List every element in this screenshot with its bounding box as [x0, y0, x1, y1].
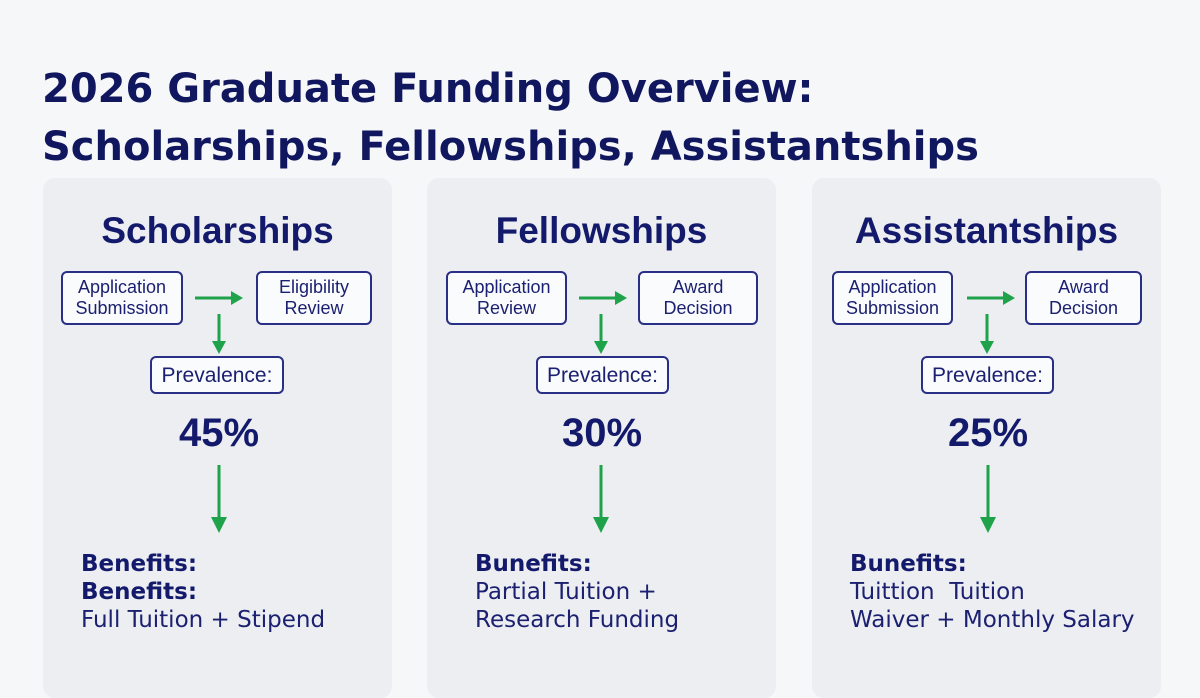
box: application review: [446, 271, 567, 325]
box: prevalence: Prevalence:: [547, 364, 658, 386]
stat: 25%: 25%: [948, 411, 1028, 455]
panel: fellowships: [427, 178, 776, 698]
box: application review: Application: [462, 277, 551, 297]
box: eligibility review: Review: [284, 298, 344, 318]
heading: Fellowships: [496, 210, 707, 251]
box: prevalence: [536, 356, 669, 394]
benefits text: Benefits:: [81, 551, 197, 577]
stat: 30%: 30%: [562, 411, 642, 455]
arrows: [579, 291, 627, 533]
box: award decision: Decision: [1049, 298, 1118, 318]
box: prevalence: [921, 356, 1054, 394]
box: application submission: Submission: [75, 298, 169, 318]
box: prevalence: Prevalence:: [932, 364, 1043, 386]
box: award decision: [638, 271, 758, 325]
box: award decision: Award: [673, 277, 723, 297]
benefits text: [475, 551, 679, 633]
benefits text: [850, 551, 1135, 633]
box: prevalence: Prevalence:: [162, 364, 272, 386]
benefits text: [81, 551, 325, 633]
benefits text: Waiver + Monthly Salary: [850, 607, 1135, 633]
box: application submission: [61, 271, 183, 325]
box: eligibility review: Eligibility: [279, 277, 349, 297]
box: application submission: [832, 271, 953, 325]
benefits text: Bunefits:: [475, 551, 592, 577]
box: application submission: Application: [78, 277, 166, 297]
arrows: [967, 291, 1015, 533]
box: award decision: [1025, 271, 1142, 325]
box: eligibility review: [256, 271, 372, 325]
heading: Assistantships: [855, 210, 1118, 251]
title: Scholarships, Fellowships, Assistantships: [42, 124, 979, 170]
benefits text: Partial Tuition +: [475, 579, 657, 605]
box: application submission: Submission: [846, 298, 939, 318]
benefits text: Benefits:: [81, 579, 197, 605]
benefits text: Tuittion Tuition: [850, 579, 1025, 605]
benefits text: Bunefits:: [850, 551, 967, 577]
panel: scholarships: [43, 178, 392, 698]
arrows: [195, 291, 243, 533]
box: application review: Review: [477, 298, 536, 318]
heading: Scholarships: [101, 210, 334, 251]
panel: assistantships: [812, 178, 1161, 698]
title: 2026 Graduate Funding Overview:: [42, 66, 814, 112]
box: prevalence: [150, 356, 284, 394]
stat: 45%: 45%: [179, 411, 259, 455]
box: application submission: Application: [848, 277, 937, 297]
benefits text: Research Funding: [475, 607, 679, 633]
box: award decision: Award: [1058, 277, 1109, 297]
title: [42, 66, 979, 170]
benefits text: Full Tuition + Stipend: [81, 607, 325, 633]
box: award decision: Decision: [663, 298, 733, 318]
